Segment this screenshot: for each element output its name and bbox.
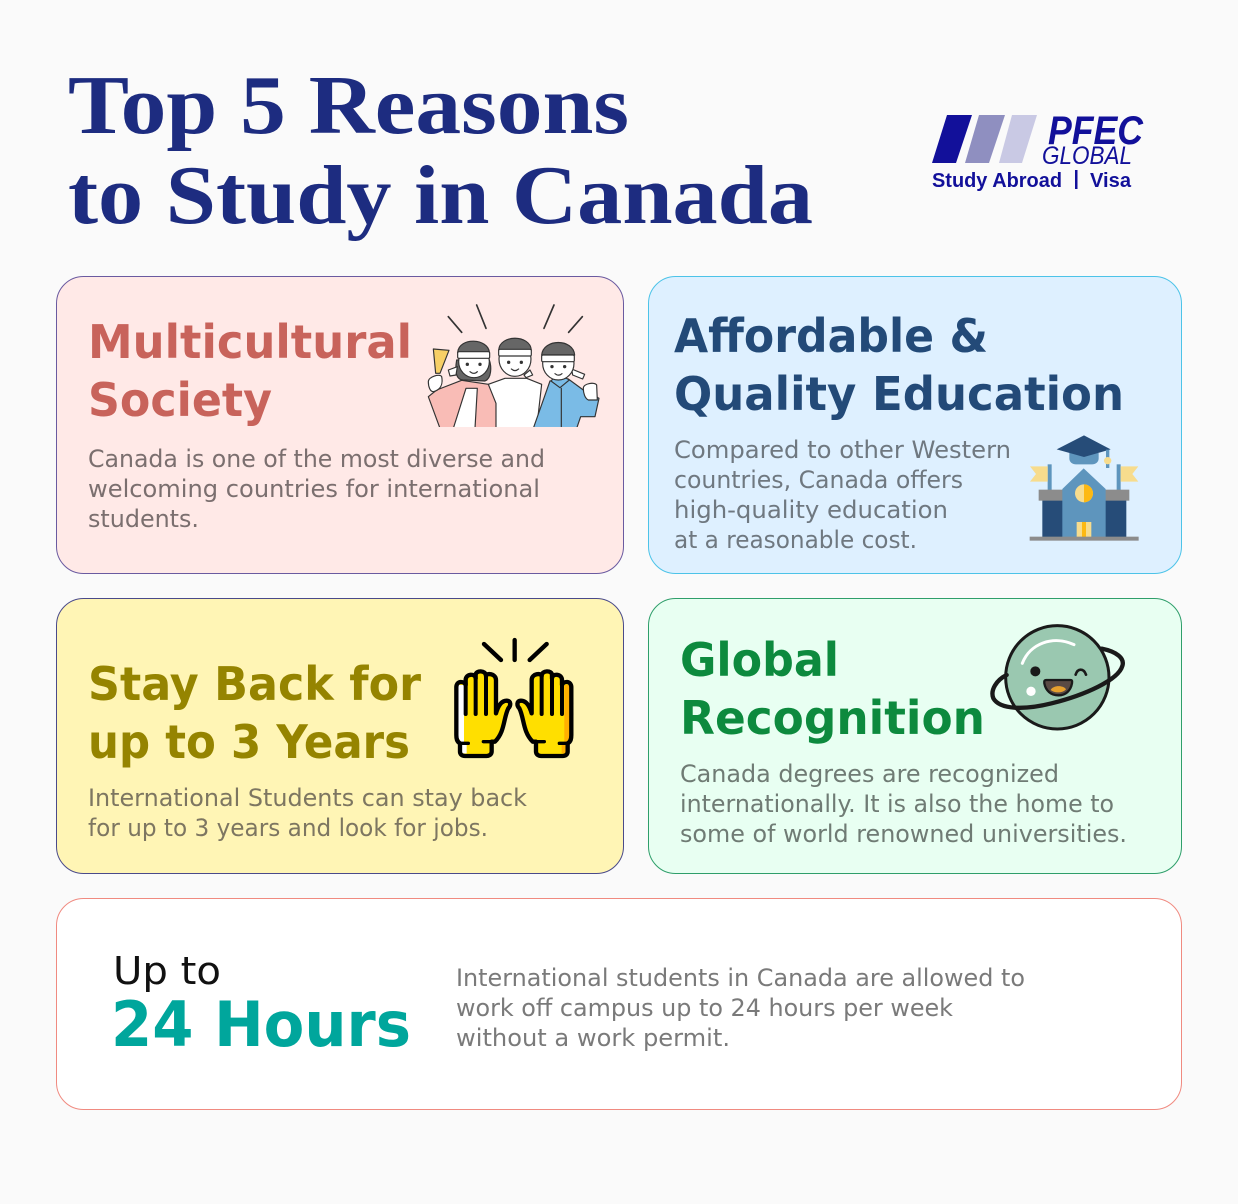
title: to Study in Canada (68, 149, 813, 242)
logo: PFEC Global: Study Abroad (932, 170, 1062, 192)
text: stay back description (88, 784, 527, 842)
right hand (517, 671, 571, 756)
title: Top 5 Reasons (68, 59, 629, 152)
heading: affordable education (674, 309, 1124, 421)
text: work hours description (456, 964, 1025, 1052)
logo: PFEC Global: PFEC (1048, 109, 1144, 153)
text: global recognition description: some of world renowned universities. (680, 820, 1127, 848)
text: stay back description: for up to 3 years and look for jobs. (88, 814, 488, 842)
text: work hours description: International students in Canada are allowed to (456, 964, 1025, 992)
heading: global recognition: Recognition (680, 691, 985, 745)
text: up to: Up to (113, 949, 221, 993)
heading: stay back: Stay Back for (88, 657, 421, 711)
text: affordable description: Compared to other Western (674, 436, 1011, 464)
left hand (456, 671, 510, 756)
panel: affordable and quality education (648, 276, 1182, 574)
icon: raised hands (456, 640, 571, 756)
logo: PFEC Global (932, 109, 1144, 192)
panel: multicultural society (56, 276, 624, 574)
heading: stay back: up to 3 Years (88, 715, 410, 769)
heading: global recognition: Global (680, 633, 839, 687)
panel: up to 24 hours (56, 898, 1182, 1110)
text: affordable description (674, 436, 1011, 554)
text: global recognition description: Canada degrees are recognized (680, 760, 1059, 788)
text: multicultural description: Canada is one of the most diverse and (88, 445, 545, 473)
text: multicultural description: welcoming countries for international (88, 475, 540, 503)
text: affordable description: high-quality education (674, 496, 948, 524)
text: work hours description: without a work permit. (456, 1024, 730, 1052)
title (68, 59, 813, 242)
text: global recognition description (680, 760, 1127, 848)
text: work hours description: work off campus up to 24 hours per week (456, 994, 953, 1022)
heading: affordable education: Quality Education (674, 367, 1124, 421)
logo: PFEC Global: Visa (1090, 170, 1132, 192)
icon: university building with graduation cap (1030, 435, 1139, 541)
panel: stay back (56, 598, 624, 874)
icon: smiling planet (992, 626, 1123, 729)
text: multicultural description: students. (88, 505, 199, 533)
heading: global recognition (680, 633, 985, 745)
text: affordable description: countries, Canada offers (674, 466, 963, 494)
heading: multicultural society (88, 315, 412, 427)
text: multicultural description (88, 445, 545, 533)
panel: global recognition (648, 598, 1182, 874)
text: affordable description: at a reasonable cost. (674, 526, 917, 554)
heading: stay back (88, 657, 421, 769)
logo: PFEC Global: GLOBAL (1042, 142, 1132, 170)
text: global recognition description: internationally. It is also the home to (680, 790, 1114, 818)
heading: affordable education: Affordable & (674, 309, 988, 363)
text: stay back description: International Students can stay back (88, 784, 527, 812)
heading: multicultural society: Society (88, 373, 272, 427)
heading: multicultural society: Multicultural (88, 315, 412, 369)
icon: three friends cheering (420, 305, 610, 430)
heading: 24 hours: 24 Hours (111, 988, 411, 1061)
